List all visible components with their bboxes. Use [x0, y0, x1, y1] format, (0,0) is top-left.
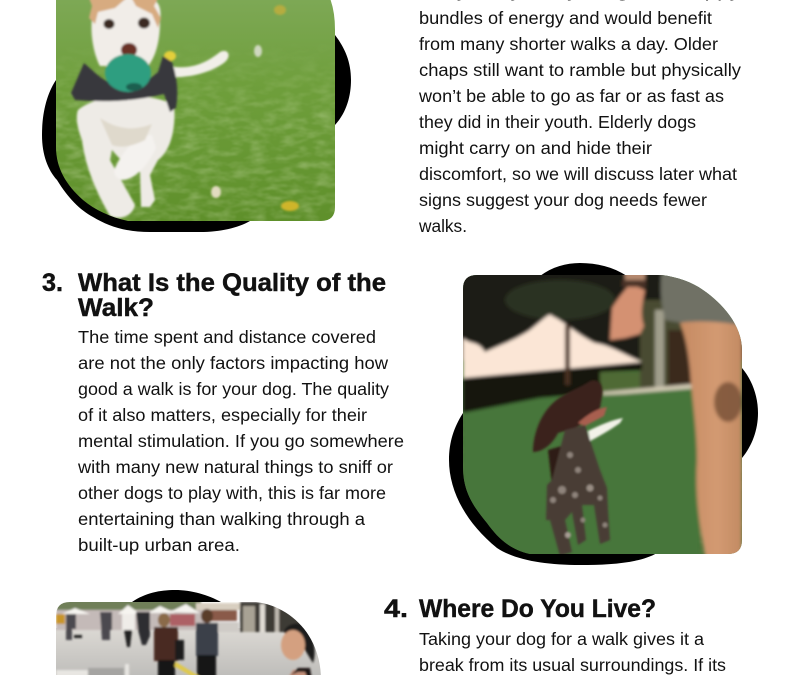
- text: paragraph on where you live: [419, 629, 726, 675]
- heading: section 3: What Is the Quality of the: [78, 269, 386, 297]
- text: paragraph on walk quality: mental stimulation. If you go somewhere: [78, 431, 404, 451]
- text: paragraph on walk quality: The time spent and distance covered: [78, 327, 376, 347]
- panel: street crowd photo: [50, 590, 330, 675]
- text: paragraph on dog age: walks.: [418, 216, 467, 236]
- text: paragraph on walk quality: [77, 327, 404, 555]
- text: paragraph on where you live: break from its usual surroundings. If its: [419, 655, 726, 675]
- text: paragraph on dog age: signs suggest your dog needs fewer: [419, 190, 707, 210]
- text: paragraph on dog age: might carry on and hide their: [419, 138, 652, 158]
- text: paragraph on dog age: chaps still want to ramble but physically: [419, 60, 741, 80]
- text: paragraph on walk quality: of it also matters, especially for their: [78, 405, 367, 425]
- text: paragraph on where you live: Taking your dog for a walk gives it a: [419, 629, 704, 649]
- heading: section 3: Walk?: [78, 294, 154, 322]
- text: paragraph on dog age: they did in their youth. Elderly dogs: [419, 112, 696, 132]
- text: paragraph on dog age: [418, 0, 741, 236]
- panel: running dog photo: [42, 0, 351, 232]
- text: paragraph on walk quality: built-up urban area.: [78, 535, 240, 555]
- photo: dog running with green ball: [50, 0, 340, 225]
- heading: section 4: Where Do You Live?: [419, 595, 656, 623]
- black blob behind puppy photo: [449, 263, 758, 565]
- text: paragraph on walk quality: with many new natural things to sniff or: [77, 457, 393, 477]
- black blob behind dog photo: [42, 35, 351, 232]
- photo: puppy looking up at owner: [460, 268, 745, 560]
- text: paragraph on dog age: won’t be able to go as far or as fast as: [418, 86, 724, 106]
- black blob behind street photo: [132, 590, 221, 602]
- heading: section 4: 4.: [384, 595, 408, 623]
- panel: puppy and owner photo: [449, 263, 758, 565]
- heading: section 3: 3.: [42, 269, 63, 297]
- text: paragraph on walk quality: entertaining than walking through a: [78, 509, 365, 529]
- text: paragraph on dog age: from many shorter walks a day. Older: [419, 34, 718, 54]
- photo: people walking on a city street: [50, 600, 330, 675]
- text: paragraph on dog age: discomfort, so we will discuss later what: [419, 164, 737, 184]
- text: paragraph on walk quality: are not the only factors impacting how: [78, 353, 388, 373]
- text: paragraph on walk quality: other dogs to play with, this is far more: [78, 483, 386, 503]
- heading: section 3: [42, 269, 386, 322]
- text: paragraph on walk quality: good a walk is for your dog. The quality: [78, 379, 389, 399]
- text: paragraph on dog age: bundles of energy and would benefit: [419, 8, 712, 28]
